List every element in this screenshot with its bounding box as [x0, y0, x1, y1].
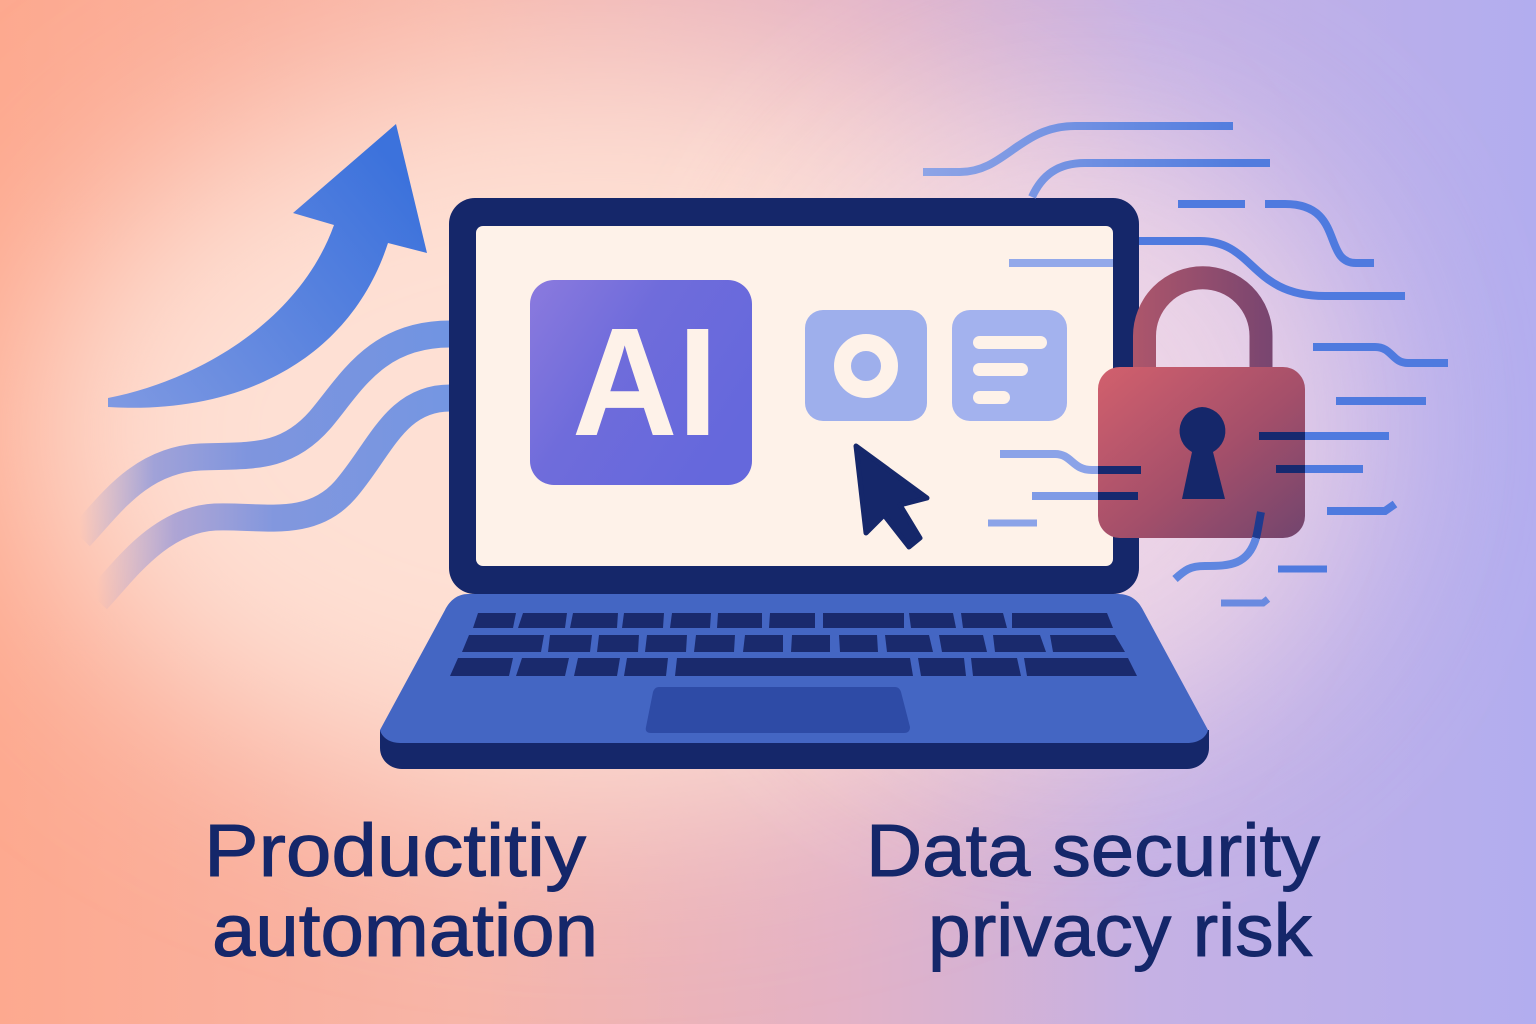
shackle [1144, 278, 1261, 367]
laptop screen bezel [449, 198, 1139, 594]
icon: record tile [805, 310, 927, 421]
icon: mouse cursor [856, 446, 927, 547]
icon: upward growth arrow [108, 124, 427, 408]
keyboard [450, 613, 1137, 676]
laptop deck [380, 594, 1208, 743]
icon: flowing productivity waves [80, 334, 450, 600]
icon: padlock [1098, 278, 1305, 538]
icon: text lines tile [952, 310, 1067, 421]
label: data security: Data security [866, 809, 1320, 892]
label: productivity: Productitiy [204, 809, 586, 892]
data streams over lock [1098, 436, 1327, 603]
lock body [1098, 367, 1305, 538]
label: data security: privacy risk [928, 889, 1313, 972]
laptop base edge [380, 730, 1209, 769]
screen [476, 226, 1113, 566]
AI label: AI [572, 296, 718, 468]
label: productivity: automation [212, 889, 598, 972]
keyhole [1180, 407, 1225, 499]
laptop [380, 198, 1209, 769]
label: productivity [204, 809, 598, 972]
data streams behind lock [923, 126, 1448, 523]
AI tile [530, 280, 752, 485]
trackpad [646, 687, 910, 733]
label: data security [866, 809, 1320, 972]
